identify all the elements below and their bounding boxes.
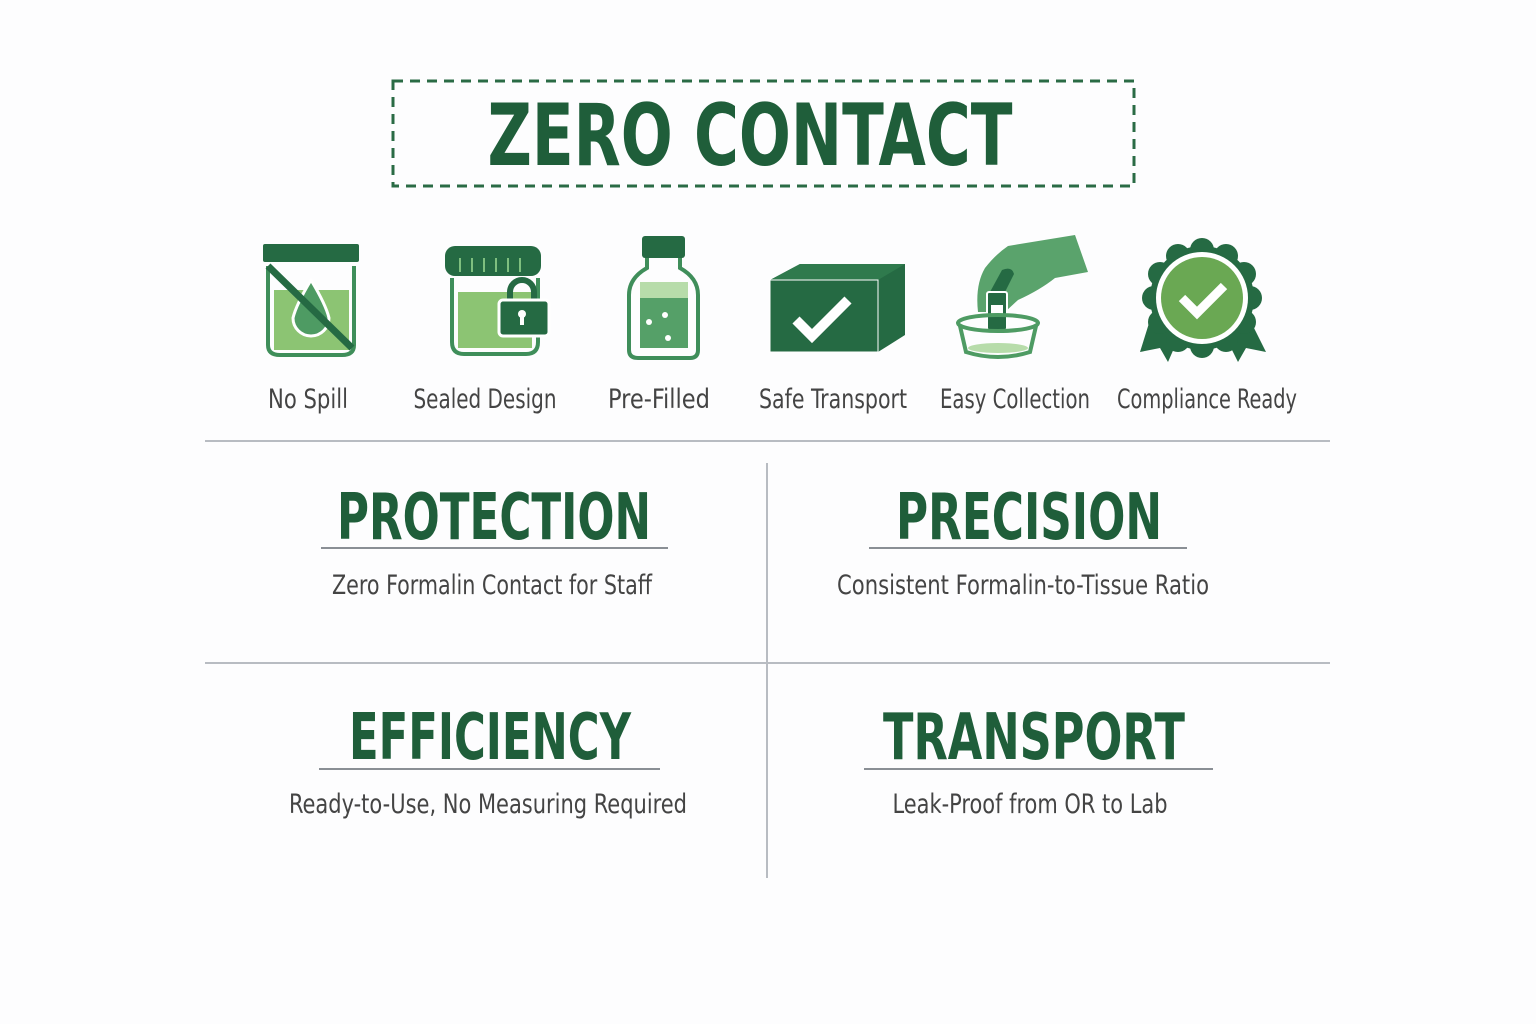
panel: protection	[321, 481, 668, 601]
icon labels: Easy Collection	[940, 384, 1090, 415]
panel: efficiency: Ready-to-Use, No Measuring Required	[289, 789, 687, 820]
icon: pre-filled	[629, 236, 698, 358]
panel: transport	[864, 701, 1213, 820]
icon: compliance ready	[1140, 238, 1266, 362]
icon labels: Safe Transport	[759, 384, 907, 415]
icon: sealed design	[445, 246, 549, 354]
panel: transport: Leak-Proof from OR to Lab	[892, 789, 1168, 820]
icon labels: Pre-Filled	[608, 384, 710, 415]
icon: safe transport	[770, 264, 905, 352]
panel: protection: Zero Formalin Contact for Staff	[332, 570, 653, 601]
panel: precision: Consistent Formalin-to-Tissue Ratio	[837, 570, 1209, 601]
icon labels: No Spill	[268, 384, 348, 415]
icon: easy collection	[958, 235, 1088, 357]
panel: efficiency: EFFICIENCY	[349, 701, 632, 775]
icon labels: Sealed Design	[414, 384, 556, 415]
panel: transport: TRANSPORT	[883, 701, 1185, 775]
icon labels: Compliance Ready	[1117, 384, 1297, 415]
title: ZERO CONTACT	[488, 86, 1013, 186]
panel: precision: PRECISION	[896, 481, 1162, 555]
icon: no spill	[263, 244, 359, 355]
panel: precision	[837, 481, 1209, 601]
panel: efficiency	[289, 701, 687, 820]
icon labels	[268, 384, 1297, 415]
panel: protection: PROTECTION	[337, 481, 651, 555]
